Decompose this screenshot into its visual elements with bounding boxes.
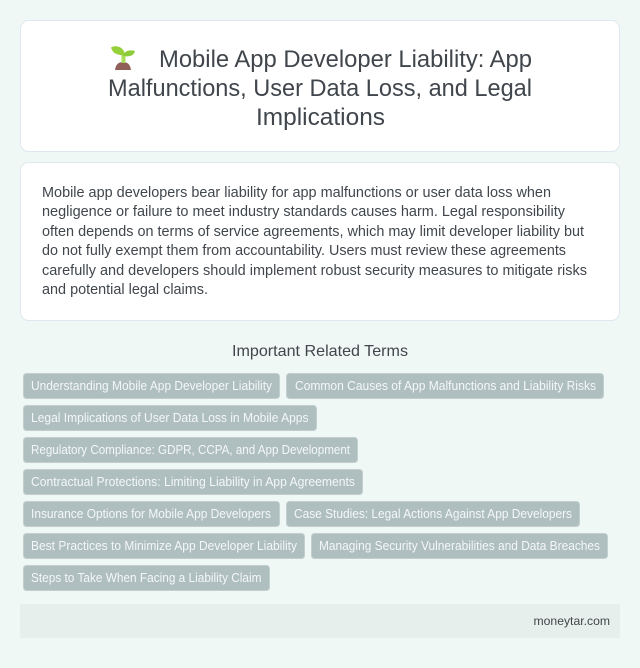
tag: Insurance Options for Mobile App Developers [31, 507, 271, 521]
tag [286, 374, 604, 398]
related terms tags [24, 374, 608, 590]
summary text: Mobile app developers bear liability for app malfunctions or user data loss when [42, 185, 551, 201]
related terms heading: Important Related Terms [232, 343, 408, 360]
tag: Steps to Take When Facing a Liability Claim [31, 571, 262, 585]
tag: Understanding Mobile App Developer Liability [31, 379, 273, 393]
summary text: do not fully exempt them from accountability. Users must review these agreements [42, 243, 566, 259]
summary panel [20, 162, 620, 320]
tag: Case Studies: Legal Actions Against App Developers [294, 507, 572, 521]
heading [108, 46, 532, 131]
summary text: often depends on terms of service agreements, which may limit developer liability but [42, 224, 584, 240]
summary text [42, 185, 587, 298]
tag [24, 534, 304, 558]
title panel [20, 20, 620, 152]
tag [24, 374, 280, 398]
tag [24, 502, 280, 526]
footer [20, 604, 620, 638]
heading: Mobile App Developer Liability: App [159, 46, 532, 73]
tag [24, 566, 270, 590]
tag: Managing Security Vulnerabilities and Data Breaches [319, 539, 600, 553]
summary text: negligence or failure to meet industry standards causes harm. Legal responsibility [42, 204, 566, 220]
tag: Common Causes of App Malfunctions and Liability Risks [295, 379, 596, 393]
heading: Implications [256, 104, 385, 131]
tag [312, 534, 608, 558]
icon: sprout [111, 46, 135, 70]
tag: Regulatory Compliance: GDPR, CCPA, and App Development [31, 443, 350, 457]
summary text: and potential legal claims. [42, 282, 208, 298]
summary text: carefully and developers should implement robust security measures to mitigate risks [42, 263, 587, 279]
tag [24, 438, 358, 462]
tag: Contractual Protections: Limiting Liability in App Agreements [31, 475, 355, 489]
tag [24, 470, 362, 494]
heading: Malfunctions, User Data Loss, and Legal [108, 75, 532, 102]
tag [24, 406, 316, 430]
tag [286, 502, 580, 526]
footer source text: moneytar.com [534, 614, 610, 628]
tag: Best Practices to Minimize App Developer Liability [31, 539, 298, 553]
tag: Legal Implications of User Data Loss in Mobile Apps [31, 411, 308, 425]
